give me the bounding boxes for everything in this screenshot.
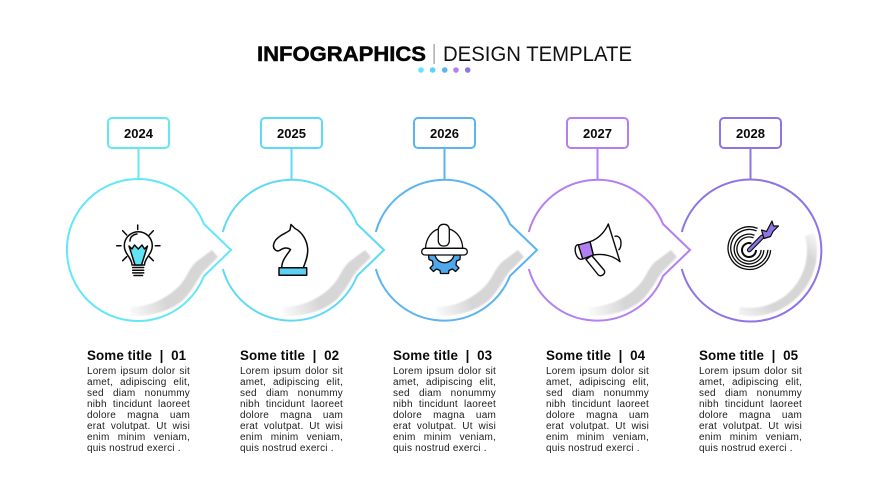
text block: step 05: Lorem ipsum dolor sit bbox=[699, 366, 802, 377]
icon: hard hat with gear bbox=[422, 224, 467, 274]
text block: step 05: enim minim veniam, bbox=[699, 432, 802, 443]
text block: step 01: sed diam nonummy bbox=[87, 388, 190, 399]
text block: step 04: quis nostrud exerci . bbox=[546, 443, 640, 454]
text block: step 03: erat volutpat. Ut wisi bbox=[393, 421, 496, 432]
text block: step 05: sed diam nonummy bbox=[699, 388, 802, 399]
icon: chess knight bbox=[273, 224, 308, 275]
text block: step 04 bbox=[546, 348, 649, 454]
icon: light bulb bbox=[117, 225, 160, 276]
step 3 shape: 2026: 2026 bbox=[430, 126, 459, 141]
text block: step 01: dolore magna uam bbox=[87, 410, 190, 421]
text block: step 04: Some title | 04 bbox=[546, 348, 645, 363]
text block: step 04: Lorem ipsum dolor sit bbox=[546, 366, 649, 377]
text block: step 03: nibh tincidunt laoreet bbox=[393, 399, 496, 410]
step 5 shape: 2028 bbox=[682, 118, 821, 322]
icon: target with arrow bbox=[729, 221, 778, 268]
text block: step 04: nibh tincidunt laoreet bbox=[546, 399, 649, 410]
text block: step 01: quis nostrud exerci . bbox=[87, 443, 181, 454]
text block: step 04: dolore magna uam bbox=[546, 410, 649, 421]
icon: megaphone bbox=[574, 224, 621, 276]
step 5 shape: 2028: 2028 bbox=[736, 126, 765, 141]
title: INFOGRAPHICS bbox=[257, 42, 426, 66]
text block: step 04: amet, adipiscing elit, bbox=[546, 377, 649, 388]
text block: step 03: dolore magna uam bbox=[393, 410, 496, 421]
title dots bbox=[418, 67, 471, 73]
text block: step 04: sed diam nonummy bbox=[546, 388, 649, 399]
text block: step 03: enim minim veniam, bbox=[393, 432, 496, 443]
text block: step 03 bbox=[393, 348, 496, 454]
text block: step 01: nibh tincidunt laoreet bbox=[87, 399, 190, 410]
step 1 shape: 2024 bbox=[67, 118, 231, 321]
text block: step 03: amet, adipiscing elit, bbox=[393, 377, 496, 388]
text block: step 05: Some title | 05 bbox=[699, 348, 798, 363]
text block: step 02 bbox=[240, 348, 343, 454]
text block: step 03: sed diam nonummy bbox=[393, 388, 496, 399]
text block: step 05: dolore magna uam bbox=[699, 410, 802, 421]
title bbox=[257, 42, 632, 66]
text block: step 01: enim minim veniam, bbox=[87, 432, 190, 443]
text block: step 03: Lorem ipsum dolor sit bbox=[393, 366, 496, 377]
text block: step 03: Some title | 03 bbox=[393, 348, 492, 363]
step 2 shape: 2025: 2025 bbox=[277, 126, 306, 141]
text block: step 05: erat volutpat. Ut wisi bbox=[699, 421, 802, 432]
text block: step 02: quis nostrud exerci . bbox=[240, 443, 334, 454]
text block: step 02: amet, adipiscing elit, bbox=[240, 377, 343, 388]
text block: step 02: erat volutpat. Ut wisi bbox=[240, 421, 343, 432]
text block: step 01: amet, adipiscing elit, bbox=[87, 377, 190, 388]
text block: step 02: sed diam nonummy bbox=[240, 388, 343, 399]
step 1 shape: 2024: 2024 bbox=[124, 126, 154, 141]
text block: step 03: quis nostrud exerci . bbox=[393, 443, 487, 454]
text block: step 02: enim minim veniam, bbox=[240, 432, 343, 443]
text block: step 05 bbox=[699, 348, 802, 454]
text block: step 05: nibh tincidunt laoreet bbox=[699, 399, 802, 410]
text block: step 04: erat volutpat. Ut wisi bbox=[546, 421, 649, 432]
title: DESIGN TEMPLATE bbox=[443, 43, 632, 66]
text block: step 05: quis nostrud exerci . bbox=[699, 443, 793, 454]
text block: step 01 bbox=[87, 348, 190, 454]
step 2 shape: 2025 bbox=[223, 118, 384, 321]
text block: step 02: nibh tincidunt laoreet bbox=[240, 399, 343, 410]
text block: step 02: Some title | 02 bbox=[240, 348, 339, 363]
step 3 shape: 2026 bbox=[376, 118, 537, 321]
text block: step 01: Lorem ipsum dolor sit bbox=[87, 366, 190, 377]
text block: step 05: amet, adipiscing elit, bbox=[699, 377, 802, 388]
step 4 shape: 2027: 2027 bbox=[583, 126, 612, 141]
text block: step 01: erat volutpat. Ut wisi bbox=[87, 421, 190, 432]
step 4 shape: 2027 bbox=[529, 118, 690, 321]
text block: step 04: enim minim veniam, bbox=[546, 432, 649, 443]
text block: step 02: dolore magna uam bbox=[240, 410, 343, 421]
text block: step 02: Lorem ipsum dolor sit bbox=[240, 366, 343, 377]
text block: step 01: Some title | 01 bbox=[87, 348, 186, 363]
